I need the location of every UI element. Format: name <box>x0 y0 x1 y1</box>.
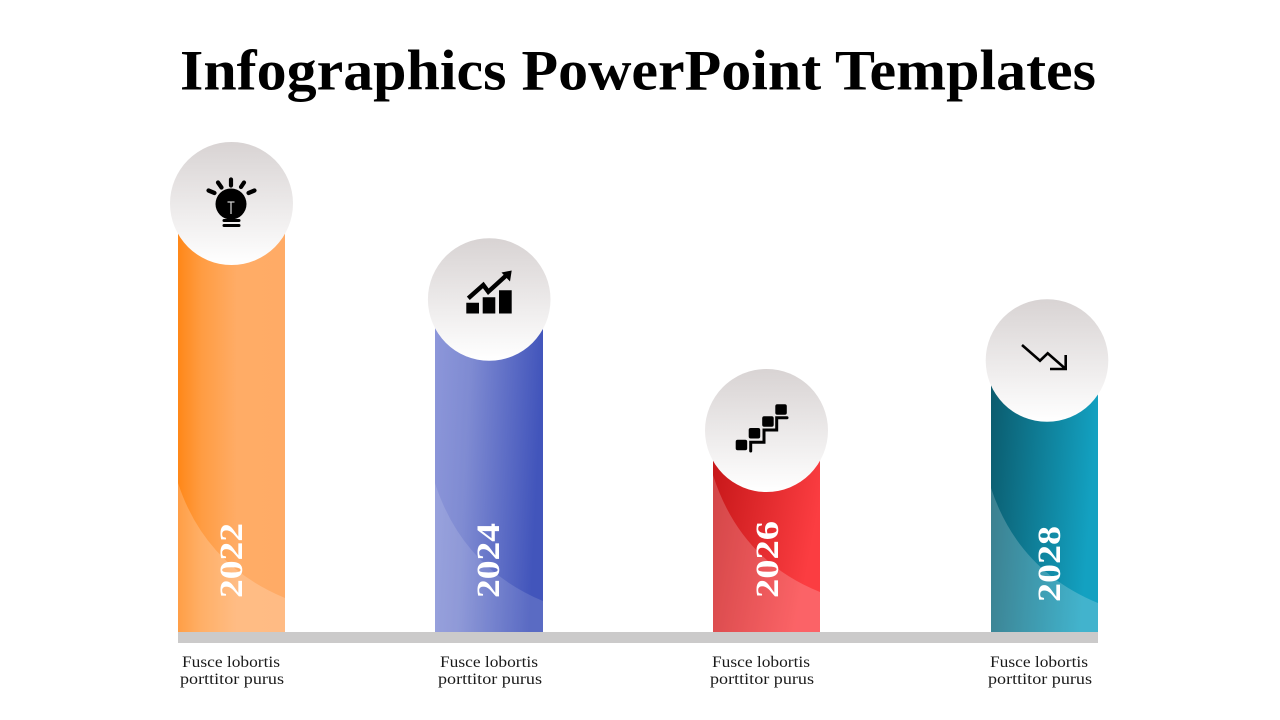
bar highlight: orange <box>178 483 285 632</box>
bar: orange <box>178 200 285 632</box>
panel: 2022 column <box>170 142 293 688</box>
circle: 2028 <box>986 299 1108 422</box>
caption: 2024: Fusce lobortis <box>440 654 538 671</box>
bar: blue <box>435 300 543 632</box>
caption: 2024 <box>438 654 542 688</box>
caption: 2026: porttitor purus <box>710 671 814 688</box>
year: 2024: 2024 <box>471 523 507 598</box>
bar highlight: teal <box>991 488 1098 632</box>
year: 2028: 2028 <box>1032 526 1068 602</box>
year: 2022: 2022 <box>214 523 250 598</box>
caption: 2026: Fusce lobortis <box>712 654 810 671</box>
bar: teal <box>991 360 1098 632</box>
icon: stairs <box>736 404 787 451</box>
caption: 2028 <box>988 654 1092 688</box>
caption: 2022 <box>180 654 284 688</box>
panel: 2028 column <box>986 299 1108 688</box>
circle: 2024 <box>428 238 550 361</box>
caption: 2028: porttitor purus <box>988 671 1092 688</box>
bar highlight: blue <box>435 483 543 632</box>
baseline bar <box>178 632 1098 643</box>
bar highlight: red <box>713 475 820 632</box>
caption: 2024: porttitor purus <box>438 671 542 688</box>
bar: red <box>713 430 820 632</box>
caption: 2022: Fusce lobortis <box>182 654 280 671</box>
title: Infographics PowerPoint Templates <box>180 40 1096 102</box>
icon: light bulb <box>208 180 254 226</box>
panel: 2026 column <box>705 369 828 688</box>
panel: 2024 column <box>428 238 550 688</box>
circle: 2022 <box>170 142 293 265</box>
circle: 2026 <box>705 369 828 492</box>
caption: 2028: Fusce lobortis <box>990 654 1088 671</box>
caption: 2022: porttitor purus <box>180 671 284 688</box>
icon: falling arrow <box>1022 345 1066 369</box>
year: 2026: 2026 <box>750 521 786 598</box>
caption: 2026 <box>710 654 814 688</box>
icon: rising chart <box>466 270 512 314</box>
